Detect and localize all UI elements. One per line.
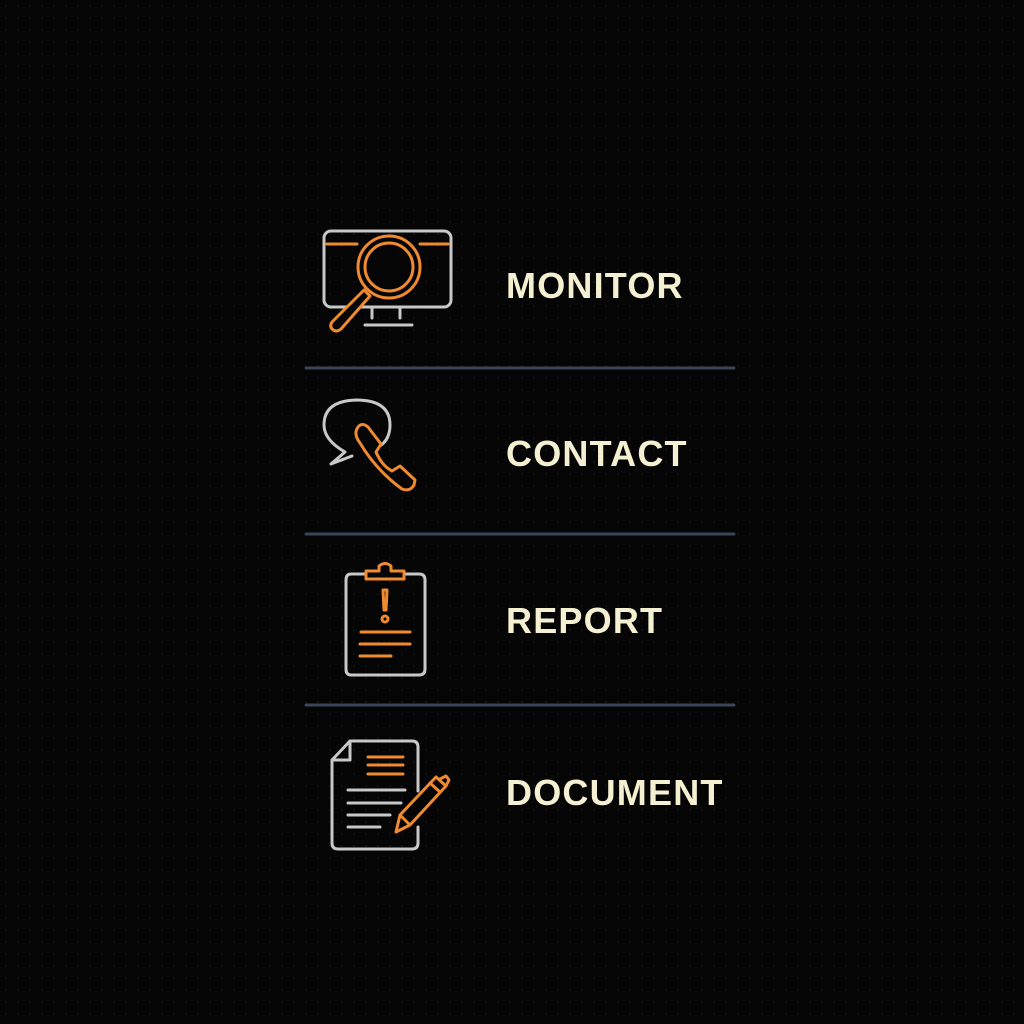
icon: speech bubble with phone [324,400,415,490]
icon: clipboard with alert [346,564,425,675]
label: monitor: MONITOR [506,265,684,306]
icon: document with pencil [332,741,449,849]
label: contact: CONTACT [506,433,688,474]
icon: monitor with magnifier [324,231,451,331]
label: document: DOCUMENT [506,772,724,813]
label: report: REPORT [506,600,663,641]
